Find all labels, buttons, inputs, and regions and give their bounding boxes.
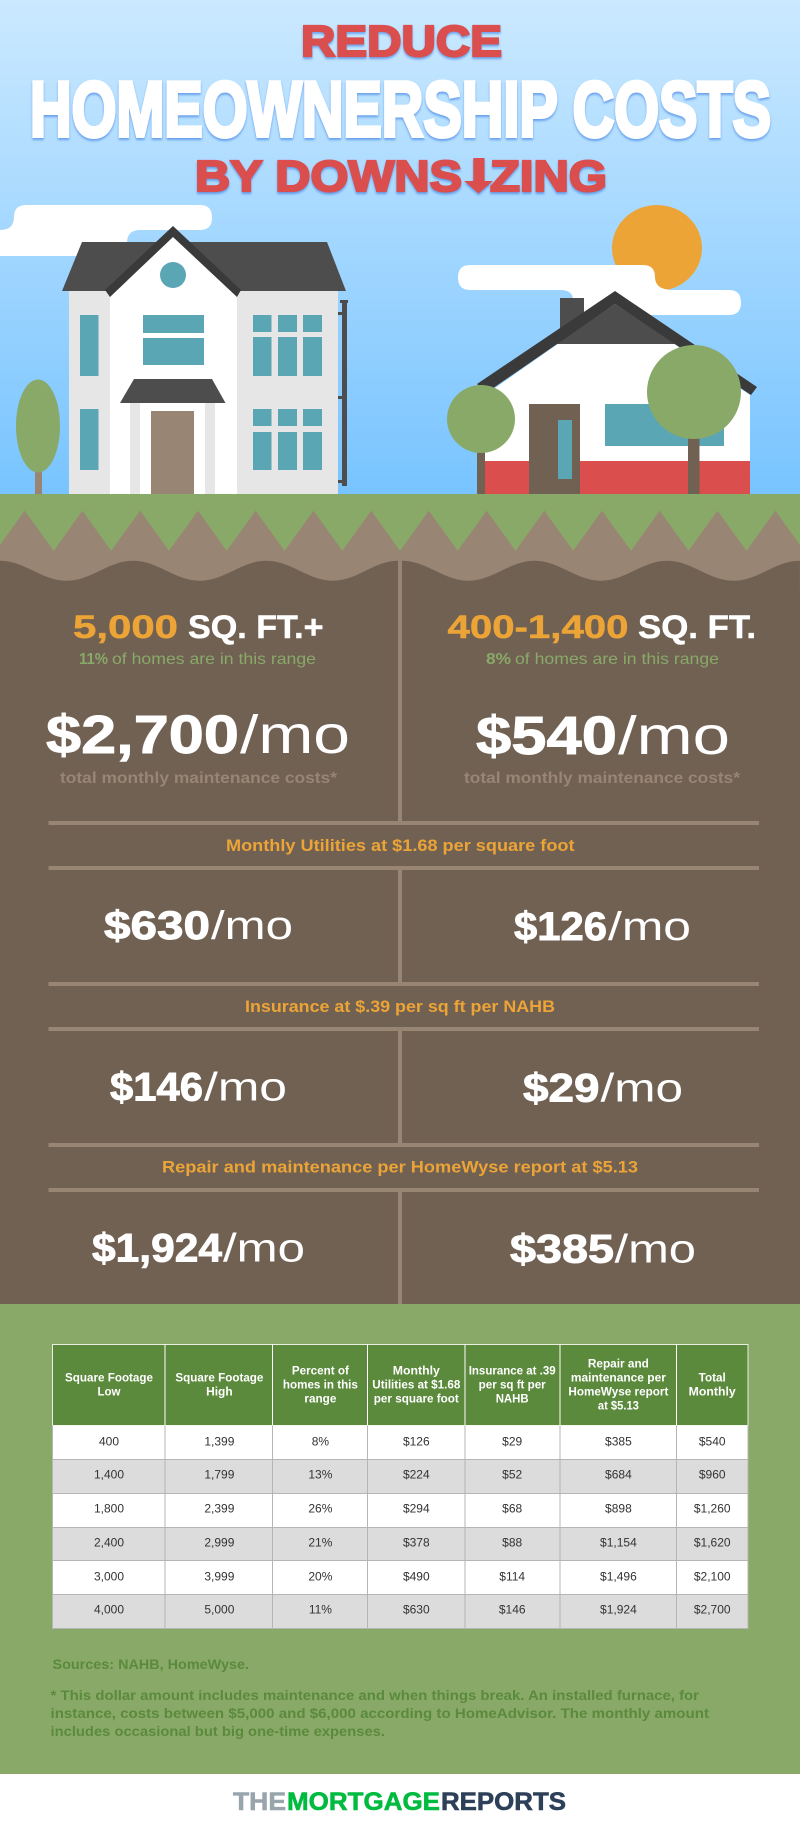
table header: homes in this xyxy=(283,1379,358,1391)
row 400: $126 xyxy=(403,1434,430,1448)
row 2,400: $88 xyxy=(502,1536,523,1550)
size heading: SQ. FT. xyxy=(638,609,756,645)
total monthly cost: /mo xyxy=(618,706,730,766)
large house xyxy=(62,226,348,494)
table header: NAHB xyxy=(496,1393,529,1405)
footer logo: THE xyxy=(233,1788,286,1816)
table header: Percent of xyxy=(292,1365,349,1377)
repair: large home: $1,924 xyxy=(92,1227,223,1271)
cloud: left xyxy=(0,205,212,256)
sun xyxy=(612,205,702,291)
heading: utilities: Monthly Utilities at $1.68 per square foot xyxy=(226,836,575,855)
total monthly cost: $540 xyxy=(476,706,617,766)
tree: small left xyxy=(447,385,515,494)
row 400: $540 xyxy=(699,1434,726,1448)
row 1,400: $224 xyxy=(403,1468,430,1482)
size heading: 5,000 xyxy=(73,609,178,645)
main roof xyxy=(62,242,346,291)
table header xyxy=(52,1344,748,1426)
row backgrounds xyxy=(52,1426,748,1628)
share of homes: 11% xyxy=(79,651,108,668)
table header: per square foot xyxy=(374,1393,459,1405)
utilities: small home: $126 xyxy=(514,905,607,949)
row 1,400: 1,400 xyxy=(94,1468,124,1482)
column: small home summary xyxy=(448,609,756,787)
row 2,400: $1,620 xyxy=(694,1536,731,1550)
table header: Total xyxy=(699,1372,726,1384)
title line: reduce: REDUCE xyxy=(301,17,502,66)
row 1,800: 1,800 xyxy=(94,1502,124,1516)
row 400: 1,399 xyxy=(204,1434,235,1448)
table header: Monthly xyxy=(393,1365,440,1377)
row 2,400: 2,400 xyxy=(94,1536,124,1550)
table header: maintenance per xyxy=(571,1372,666,1384)
insurance: small home: $29 xyxy=(523,1067,600,1111)
size heading: SQ. FT.+ xyxy=(188,609,324,645)
heading: insurance: Insurance at $.39 per sq ft per NAHB xyxy=(245,997,555,1016)
row 2,400 xyxy=(94,1536,731,1550)
row 1,400 xyxy=(94,1468,726,1482)
cost table xyxy=(52,1344,748,1628)
table header: HomeWyse report xyxy=(568,1386,669,1398)
insurance: large home: /mo xyxy=(204,1066,287,1110)
row 400: $29 xyxy=(502,1434,523,1448)
door window xyxy=(558,420,572,479)
green lower panel xyxy=(0,1304,800,1774)
heading: repair: Repair and maintenance per HomeWyse report at $5.13 xyxy=(162,1158,638,1177)
utilities: small home xyxy=(514,905,691,949)
row 4,000 xyxy=(94,1602,731,1616)
footer logo: REPORTS xyxy=(441,1788,566,1816)
utilities: small home: /mo xyxy=(608,905,691,949)
gable face xyxy=(110,237,237,300)
caption: total monthly maintenance costs* xyxy=(60,770,338,787)
utilities: large home xyxy=(104,904,293,948)
soil spikes xyxy=(0,511,800,590)
row 1,800: $68 xyxy=(502,1502,523,1516)
row 1,800 xyxy=(94,1502,731,1516)
cloud: right xyxy=(458,265,741,315)
row 3,000: $490 xyxy=(403,1570,430,1584)
row 400: 8% xyxy=(312,1434,329,1448)
porch pillars xyxy=(130,403,215,494)
title line: by downsizing: I xyxy=(470,152,488,188)
total monthly cost xyxy=(46,705,350,765)
table header: Repair and xyxy=(588,1358,649,1370)
tree: far left xyxy=(16,380,60,494)
tree: small right xyxy=(647,345,741,494)
row 4,000: 5,000 xyxy=(204,1602,235,1616)
row 3,000: 20% xyxy=(308,1570,333,1584)
row 1,400: 1,799 xyxy=(204,1468,235,1482)
footnote: includes occasional but big one-time expenses. xyxy=(50,1723,385,1739)
share of homes: of homes are in this range xyxy=(112,651,316,668)
porch roof xyxy=(120,379,226,403)
footer logo: MORTGAGE xyxy=(287,1788,440,1816)
sky background xyxy=(0,0,800,495)
row 1,800: $294 xyxy=(403,1502,430,1516)
row 1,800: $1,260 xyxy=(694,1502,731,1516)
row 400: 400 xyxy=(99,1434,119,1448)
row 400 xyxy=(99,1434,726,1448)
row 1,800: 26% xyxy=(308,1502,333,1516)
insurance: large home: $146 xyxy=(110,1066,203,1110)
size heading xyxy=(448,609,756,645)
row 1,400: $684 xyxy=(605,1468,632,1482)
panel dividers xyxy=(48,560,759,1304)
row 1,400: 13% xyxy=(308,1468,333,1482)
table header: Square Footage xyxy=(65,1372,153,1384)
total monthly cost: $2,700 xyxy=(46,705,239,765)
footer logo xyxy=(233,1788,566,1816)
row 2,400: 2,999 xyxy=(204,1536,235,1550)
share of homes: 8% xyxy=(486,651,511,668)
share of homes: of homes are in this range xyxy=(515,651,719,668)
table header: Utilities at $1.68 xyxy=(372,1379,461,1391)
sources: Sources: NAHB, HomeWyse. xyxy=(52,1656,249,1672)
insurance: large home xyxy=(110,1066,287,1110)
footnote: * This dollar amount includes maintenance and when things break. An installed furnace, for xyxy=(50,1687,700,1703)
row 3,000: $2,100 xyxy=(694,1570,731,1584)
insurance: small home xyxy=(523,1067,683,1111)
row 2,400: $378 xyxy=(403,1536,430,1550)
row 1,400: $52 xyxy=(502,1468,523,1482)
table header: per sq ft per xyxy=(479,1379,546,1391)
door xyxy=(529,404,580,494)
row 4,000: 4,000 xyxy=(94,1602,124,1616)
utilities: large home: $630 xyxy=(104,904,210,948)
round gable window xyxy=(160,262,186,288)
row 4,000: $630 xyxy=(403,1602,430,1616)
table header: Insurance at .39 xyxy=(469,1365,556,1377)
total monthly cost xyxy=(476,706,730,766)
repair: small home xyxy=(510,1228,696,1272)
house walls xyxy=(69,291,338,494)
row 3,000: $114 xyxy=(499,1570,525,1584)
row 2,400: $1,154 xyxy=(600,1536,637,1550)
row 3,000: 3,999 xyxy=(204,1570,235,1584)
repair: large home xyxy=(92,1227,305,1271)
repair: large home: /mo xyxy=(223,1227,305,1271)
insurance: small home: /mo xyxy=(600,1067,683,1111)
table header: range xyxy=(304,1393,336,1405)
title line: by downsizing xyxy=(195,152,607,201)
table header: at $5.13 xyxy=(598,1400,639,1412)
row 1,800: 2,399 xyxy=(204,1502,235,1516)
row 1,800: $898 xyxy=(605,1502,632,1516)
front door xyxy=(151,411,194,494)
repair: small home: /mo xyxy=(614,1228,696,1272)
gable trim xyxy=(105,226,241,297)
house body xyxy=(485,304,750,494)
row 4,000: $146 xyxy=(499,1602,526,1616)
row 4,000: $1,924 xyxy=(600,1602,637,1616)
repair: small home: $385 xyxy=(510,1228,614,1272)
picture window xyxy=(605,404,724,446)
title line: by downsizing: BY DOWNS xyxy=(195,152,462,201)
footnote xyxy=(50,1687,709,1739)
title xyxy=(30,17,771,201)
red base band xyxy=(485,461,750,494)
chimney xyxy=(560,298,584,332)
size heading xyxy=(73,609,324,645)
row 4,000: $2,700 xyxy=(694,1602,731,1616)
size heading: 400-1,400 xyxy=(448,609,628,645)
row 4,000: 11% xyxy=(309,1602,332,1616)
caption: total monthly maintenance costs* xyxy=(464,770,741,787)
grass band xyxy=(0,494,800,564)
row 400: $385 xyxy=(605,1434,632,1448)
row 1,400: $960 xyxy=(699,1468,726,1482)
table header: High xyxy=(206,1386,233,1398)
small house xyxy=(477,291,757,494)
underground panel xyxy=(0,561,800,1304)
utilities: large home: /mo xyxy=(211,904,293,948)
row 3,000: $1,496 xyxy=(600,1570,637,1584)
row 2,400: 21% xyxy=(308,1536,333,1550)
footnote: instance, costs between $5,000 and $6,000 according to HomeAdvisor. The monthly amount xyxy=(50,1705,709,1721)
table header: Low xyxy=(98,1386,121,1398)
row 3,000: 3,000 xyxy=(94,1570,124,1584)
gable fill xyxy=(556,304,676,344)
windows xyxy=(80,315,322,470)
roof trim xyxy=(477,291,757,395)
table header: Square Footage xyxy=(175,1372,263,1384)
title line: by downsizing: ZING xyxy=(490,152,607,201)
column: large home summary xyxy=(46,609,350,787)
table header: Monthly xyxy=(689,1386,736,1398)
downpipe xyxy=(338,300,348,486)
row 3,000 xyxy=(94,1570,731,1584)
house centre bay xyxy=(110,291,237,494)
total monthly cost: /mo xyxy=(240,705,350,765)
